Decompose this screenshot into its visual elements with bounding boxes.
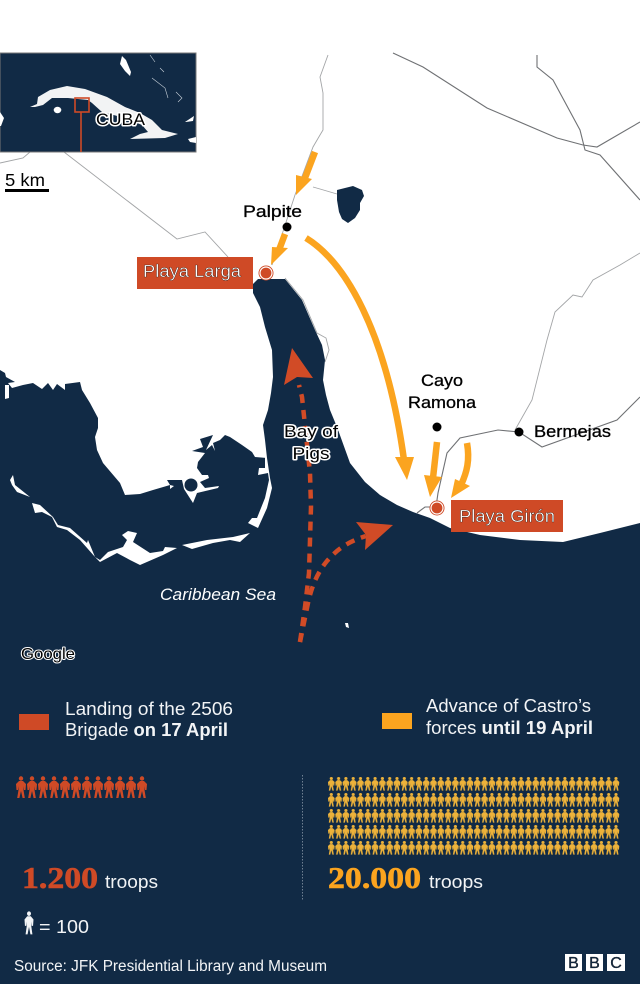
- BBC logo: [565, 954, 625, 972]
- label: Caribbean Sea: Caribbean Sea: [160, 585, 276, 604]
- legend: Castro forces: forces until 19 April: [426, 718, 593, 738]
- roads: [0, 53, 640, 513]
- BBC logo: B: [568, 955, 579, 972]
- legend: Castro forces: [382, 696, 593, 738]
- stat: Castro troops: [328, 860, 483, 895]
- Castro advance arrow: to Palpite: [296, 152, 315, 195]
- place marker: Palpite: Palpite: [243, 203, 302, 221]
- BBC logo: C: [610, 955, 622, 972]
- label: Bay of Pigs: Pigs: [292, 445, 330, 463]
- legend: Castro forces: Advance of Castro’s: [426, 696, 591, 716]
- place marker: Playa Giron: Playa Girón: [459, 506, 555, 526]
- key: one figure equals 100: [24, 911, 89, 937]
- pictogram: Brigade troops: [16, 776, 148, 799]
- Castro advance arrow: from Cayo Ramona: [424, 442, 442, 497]
- source: Source: JFK Presidential Library and Museum: [14, 958, 327, 975]
- place marker: Cayo Ramona: [408, 372, 477, 432]
- lagoon inlet: [184, 478, 198, 492]
- place marker: Bermejas: Bermejas: [534, 423, 611, 441]
- Cuba: [30, 86, 178, 139]
- scale bar: 5 km: [5, 170, 45, 190]
- stat: Castro troops: troops: [429, 872, 483, 892]
- Castro advance arrow: to Playa Giron, long route: [306, 238, 414, 480]
- divider: [302, 775, 304, 901]
- Castro advance arrow: from Bermejas road: [451, 443, 470, 498]
- Castro advance arrow: to Playa Larga: [271, 234, 288, 265]
- stat: Brigade troops: 1.200: [22, 860, 98, 895]
- place marker: Playa Larga: Playa Larga: [143, 261, 241, 281]
- Brigade landing arrow: east to Playa Giron: [300, 522, 393, 642]
- legend: Brigade landing: [19, 699, 233, 740]
- legend: Brigade landing: Brigade on 17 April: [65, 720, 228, 740]
- Brigade landing arrow: north to Playa Larga: [284, 348, 313, 642]
- pictogram: Castro troops: [328, 777, 620, 857]
- Cuba label: CUBA: [96, 110, 146, 129]
- label: Bay of Pigs: Bay of: [284, 423, 338, 441]
- map background: land: [0, 0, 640, 680]
- place marker: Cayo Ramona: Ramona: [408, 394, 477, 412]
- place marker: Palpite: [243, 203, 302, 232]
- stat: Castro troops: 20.000: [328, 860, 421, 895]
- key: one figure equals 100: = 100: [39, 916, 89, 937]
- lake: [337, 186, 364, 223]
- inset locator map: [0, 53, 196, 152]
- legend: Brigade landing: Landing of the 2506: [65, 699, 233, 719]
- place marker: Playa Giron: [430, 500, 563, 532]
- label: Bay of Pigs: [284, 423, 338, 463]
- place marker: Cayo Ramona: Cayo: [421, 372, 463, 390]
- peninsula islands and lagoon details: [5, 385, 349, 628]
- locator box: [75, 98, 89, 112]
- stat: Brigade troops: troops: [105, 872, 158, 892]
- BBC logo: B: [589, 955, 600, 972]
- islands: [0, 55, 196, 143]
- sea and Bay of Pigs: [0, 279, 640, 984]
- place marker: Playa Larga: [137, 257, 274, 289]
- stat: Brigade troops: [22, 860, 158, 895]
- map attribution: Google: Google: [21, 646, 75, 663]
